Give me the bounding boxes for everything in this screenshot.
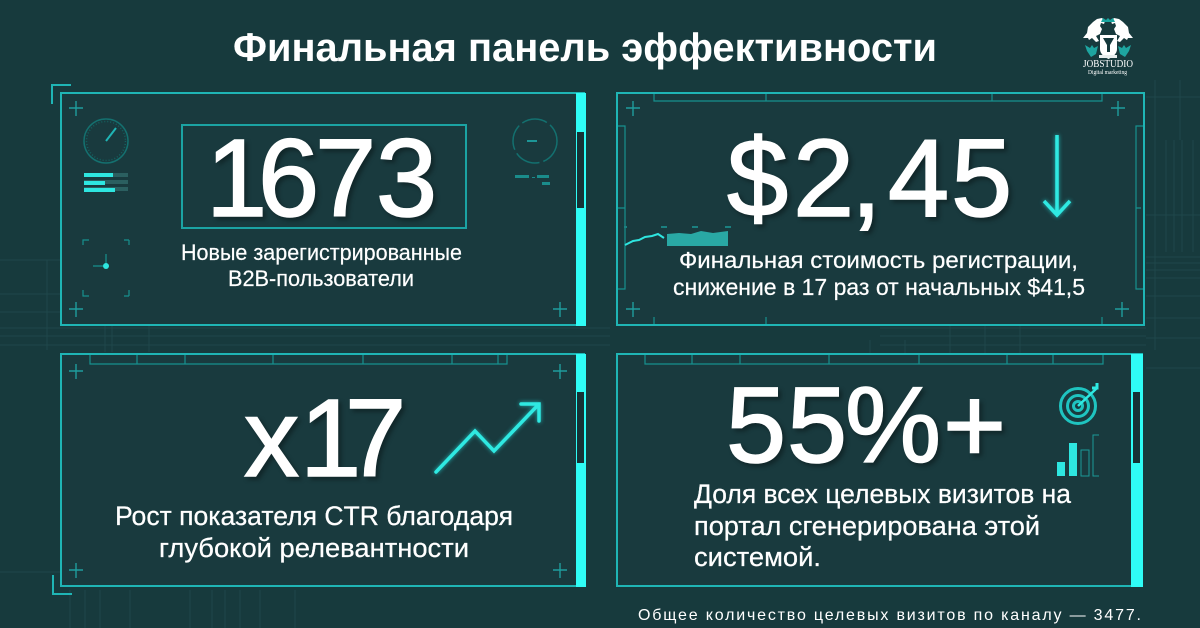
caption: [673, 247, 1085, 300]
logo tagline: Digital marketing: [1088, 69, 1127, 76]
top ruler: [645, 355, 1103, 364]
big number: x17: [244, 377, 406, 500]
caption: системой.: [694, 542, 821, 572]
top ruler: [90, 355, 507, 364]
top ruler: [654, 94, 1102, 101]
caption: [115, 501, 513, 563]
side bar slot: [577, 132, 584, 208]
panel frame: [61, 354, 584, 586]
icon: left horse: [1083, 18, 1105, 42]
side bar: [576, 354, 586, 587]
logo: JOBSTUDIO: [1083, 18, 1133, 76]
icon: ribbon: [1099, 55, 1117, 58]
title: Финальная панель эффективности: [233, 26, 937, 70]
panel frame: [617, 354, 1142, 586]
chart: sparkline: [624, 226, 731, 246]
icon: shield: [1100, 35, 1117, 59]
icon: target: [1060, 383, 1097, 424]
caption: Финальная стоимость регистрации,: [679, 247, 1078, 273]
big number: 1673: [206, 117, 437, 240]
caption: Рост показателя CTR благодаря: [115, 501, 513, 531]
side bar slot: [577, 392, 584, 463]
icon: bar chart: [1057, 435, 1099, 476]
panel frame: [61, 93, 584, 325]
side bar slot: [1133, 392, 1140, 463]
panel: visit share: [617, 354, 1143, 587]
caption: B2B-пользователи: [228, 266, 414, 291]
caption: портал сгенерирована этой: [694, 511, 1040, 541]
icon: down arrow: [1044, 135, 1070, 215]
crosses: [69, 101, 567, 317]
caption: [694, 479, 1072, 572]
caption: [181, 240, 462, 291]
side bar: [576, 93, 586, 326]
caption: Доля всех целевых визитов на: [694, 479, 1072, 509]
panel: CTR growth: [53, 354, 586, 594]
icon: right leaves: [1118, 45, 1131, 57]
crosses: [626, 101, 1129, 317]
icon: crosshair: [83, 240, 129, 296]
icon: gauge right: [513, 119, 557, 163]
corner bracket top left: [52, 85, 71, 104]
icon: gauge left: [84, 119, 128, 163]
icon: trend arrow: [436, 404, 539, 472]
crosses: [69, 364, 567, 578]
panel: new users: [52, 85, 586, 326]
panel frame: [617, 93, 1144, 325]
icon: shield emblem: [1103, 38, 1114, 52]
icon: level bars: [84, 173, 128, 192]
side rulers: [618, 126, 1143, 324]
footnote: Общее количество целевых визитов по каналу — 3477.: [638, 607, 1141, 624]
panel: registration cost: [617, 93, 1144, 325]
logo wordmark: JOBSTUDIO: [1083, 59, 1133, 70]
icon: left leaves: [1085, 45, 1098, 57]
side bar: [1131, 354, 1143, 587]
big number: $2,45: [727, 117, 1012, 240]
caption: глубокой релевантности: [159, 533, 469, 563]
icon: crown: [1101, 18, 1115, 22]
caption: снижение в 17 раз от начальных $41,5: [673, 274, 1085, 300]
number box: [182, 125, 466, 228]
caption: Новые зарегистрированные: [181, 240, 462, 265]
gauge readout: [515, 175, 550, 185]
big number: 55%+: [726, 364, 1006, 485]
icon: right horse: [1111, 18, 1133, 42]
corner bracket bottom left: [53, 575, 72, 594]
